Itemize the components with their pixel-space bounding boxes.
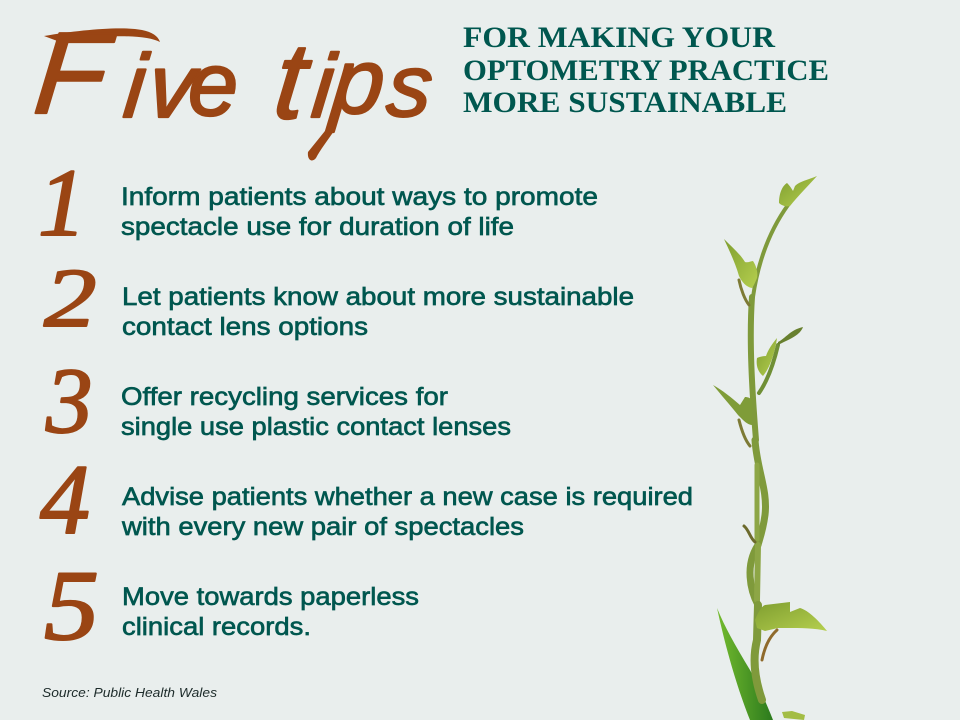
heading: subtitle: MORE SUSTAINABLE <box>463 86 787 119</box>
title: Five tips: s <box>383 36 437 135</box>
heading: subtitle: FOR MAKING YOUR <box>463 21 775 54</box>
top leaf <box>779 176 817 206</box>
tip 2: 2 <box>44 251 97 345</box>
tip 1: spectacle use for duration of life <box>121 213 514 241</box>
tip 4: Advise patients whether a new case is required <box>122 483 693 511</box>
title: Five tips: i <box>308 36 341 137</box>
tip 3: Offer recycling services for <box>121 383 448 411</box>
side bud <box>744 526 755 542</box>
tip 4: with every new pair of spectacles <box>121 513 524 541</box>
title: Five tips: i <box>120 36 153 137</box>
source note: Source: Public Health Wales <box>42 685 218 700</box>
tip 2: contact lens options <box>122 313 368 341</box>
main stem <box>750 205 788 700</box>
tip 3: 3 <box>45 350 92 453</box>
tip 5 <box>44 550 419 661</box>
tip 2 <box>44 251 634 345</box>
heading: subtitle <box>463 21 829 119</box>
tip 5: clinical records. <box>122 613 311 641</box>
tip 4 <box>40 444 693 555</box>
title: Five tips <box>29 8 437 160</box>
icon: plant illustration <box>713 176 827 720</box>
fifth leaf <box>755 602 827 631</box>
tip 5: 5 <box>44 550 99 661</box>
tip 5: Move towards paperless <box>122 583 419 611</box>
bottom bud <box>782 711 805 720</box>
third leaf and branch <box>757 338 777 376</box>
tip 2: Let patients know about more sustainable <box>122 283 634 311</box>
heading: subtitle: OPTOMETRY PRACTICE <box>463 54 829 87</box>
tip 4: 4 <box>40 444 90 555</box>
title: Five tips: e <box>188 35 238 135</box>
title: Five tips: F <box>29 8 120 138</box>
title: Five tips: p <box>325 29 390 133</box>
second leaf <box>724 239 757 288</box>
tip 1 <box>38 149 598 256</box>
fourth leaf <box>713 385 752 425</box>
grass blade <box>717 608 773 720</box>
title: Five tips: v <box>144 36 204 137</box>
tip 3 <box>45 350 511 453</box>
tip 1: Inform patients about ways to promote <box>121 183 598 211</box>
tip 3: single use plastic contact lenses <box>121 413 511 441</box>
title: Five tips: t <box>270 20 316 141</box>
tip 1: 1 <box>38 149 86 256</box>
